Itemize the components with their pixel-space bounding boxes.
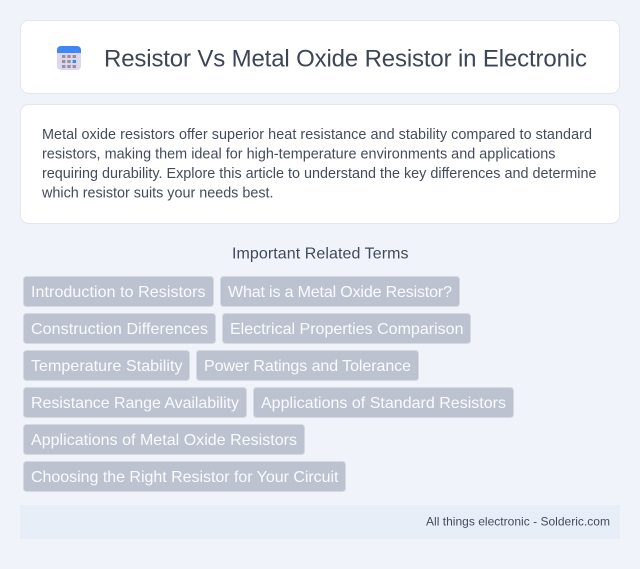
tag: choosing the right resistor bbox=[24, 462, 346, 492]
tag: temperature stability bbox=[24, 350, 190, 380]
tag: introduction to resistors: Introduction to Resistors bbox=[31, 284, 206, 301]
tag: applications of metal oxide resistors: Applications of Metal Oxide Resistors bbox=[31, 432, 297, 449]
tag: power ratings and tolerance: Power Ratings and Tolerance bbox=[204, 358, 411, 375]
panel: related term tags bbox=[24, 276, 514, 492]
tag: power ratings and tolerance bbox=[196, 350, 418, 380]
icon: calendar grid bbox=[57, 46, 81, 70]
panel: title header bbox=[20, 20, 620, 94]
tag: construction differences: Construction Differences bbox=[31, 321, 208, 338]
heading: important related terms: Important Related Terms bbox=[232, 246, 408, 262]
tag: construction differences bbox=[24, 314, 216, 344]
panel: introduction bbox=[20, 104, 620, 224]
tag: resistance range availability: Resistance Range Availability bbox=[31, 395, 239, 412]
tag: introduction to resistors bbox=[24, 276, 214, 306]
tag: applications of standard resistors: Applications of Standard Resistors bbox=[261, 395, 506, 412]
tag: temperature stability: Temperature Stability bbox=[31, 358, 182, 375]
tag: applications of standard resistors bbox=[254, 388, 514, 418]
tag: choosing the right resistor: Choosing the Right Resistor for Your Circuit bbox=[31, 469, 339, 486]
text block: introduction paragraph: requiring durability. Explore this article to understand the key differences and determine bbox=[42, 166, 596, 182]
text block: introduction paragraph: resistors, making them ideal for high-temperature environments and applications bbox=[42, 146, 556, 162]
tag: electrical properties comparison bbox=[222, 314, 470, 344]
tag: electrical properties comparison: Electrical Properties Comparison bbox=[230, 321, 464, 338]
tag: what is a metal oxide resistor: What is a Metal Oxide Resistor? bbox=[228, 284, 452, 301]
tag: applications of metal oxide resistors bbox=[24, 424, 304, 454]
text block: introduction paragraph bbox=[41, 127, 596, 202]
title: Resistor Vs Metal Oxide Resistor in Electronic bbox=[104, 46, 587, 72]
text block: introduction paragraph: which resistor suits your needs best. bbox=[41, 186, 274, 202]
footer bbox=[20, 505, 620, 539]
tag: what is a metal oxide resistor bbox=[220, 276, 460, 306]
tag: resistance range availability bbox=[24, 388, 246, 418]
text block: introduction paragraph: Metal oxide resistors offer superior heat resistance and stability compared to standard bbox=[42, 127, 592, 143]
footer credit: All things electronic - Solderic.com bbox=[426, 514, 610, 528]
